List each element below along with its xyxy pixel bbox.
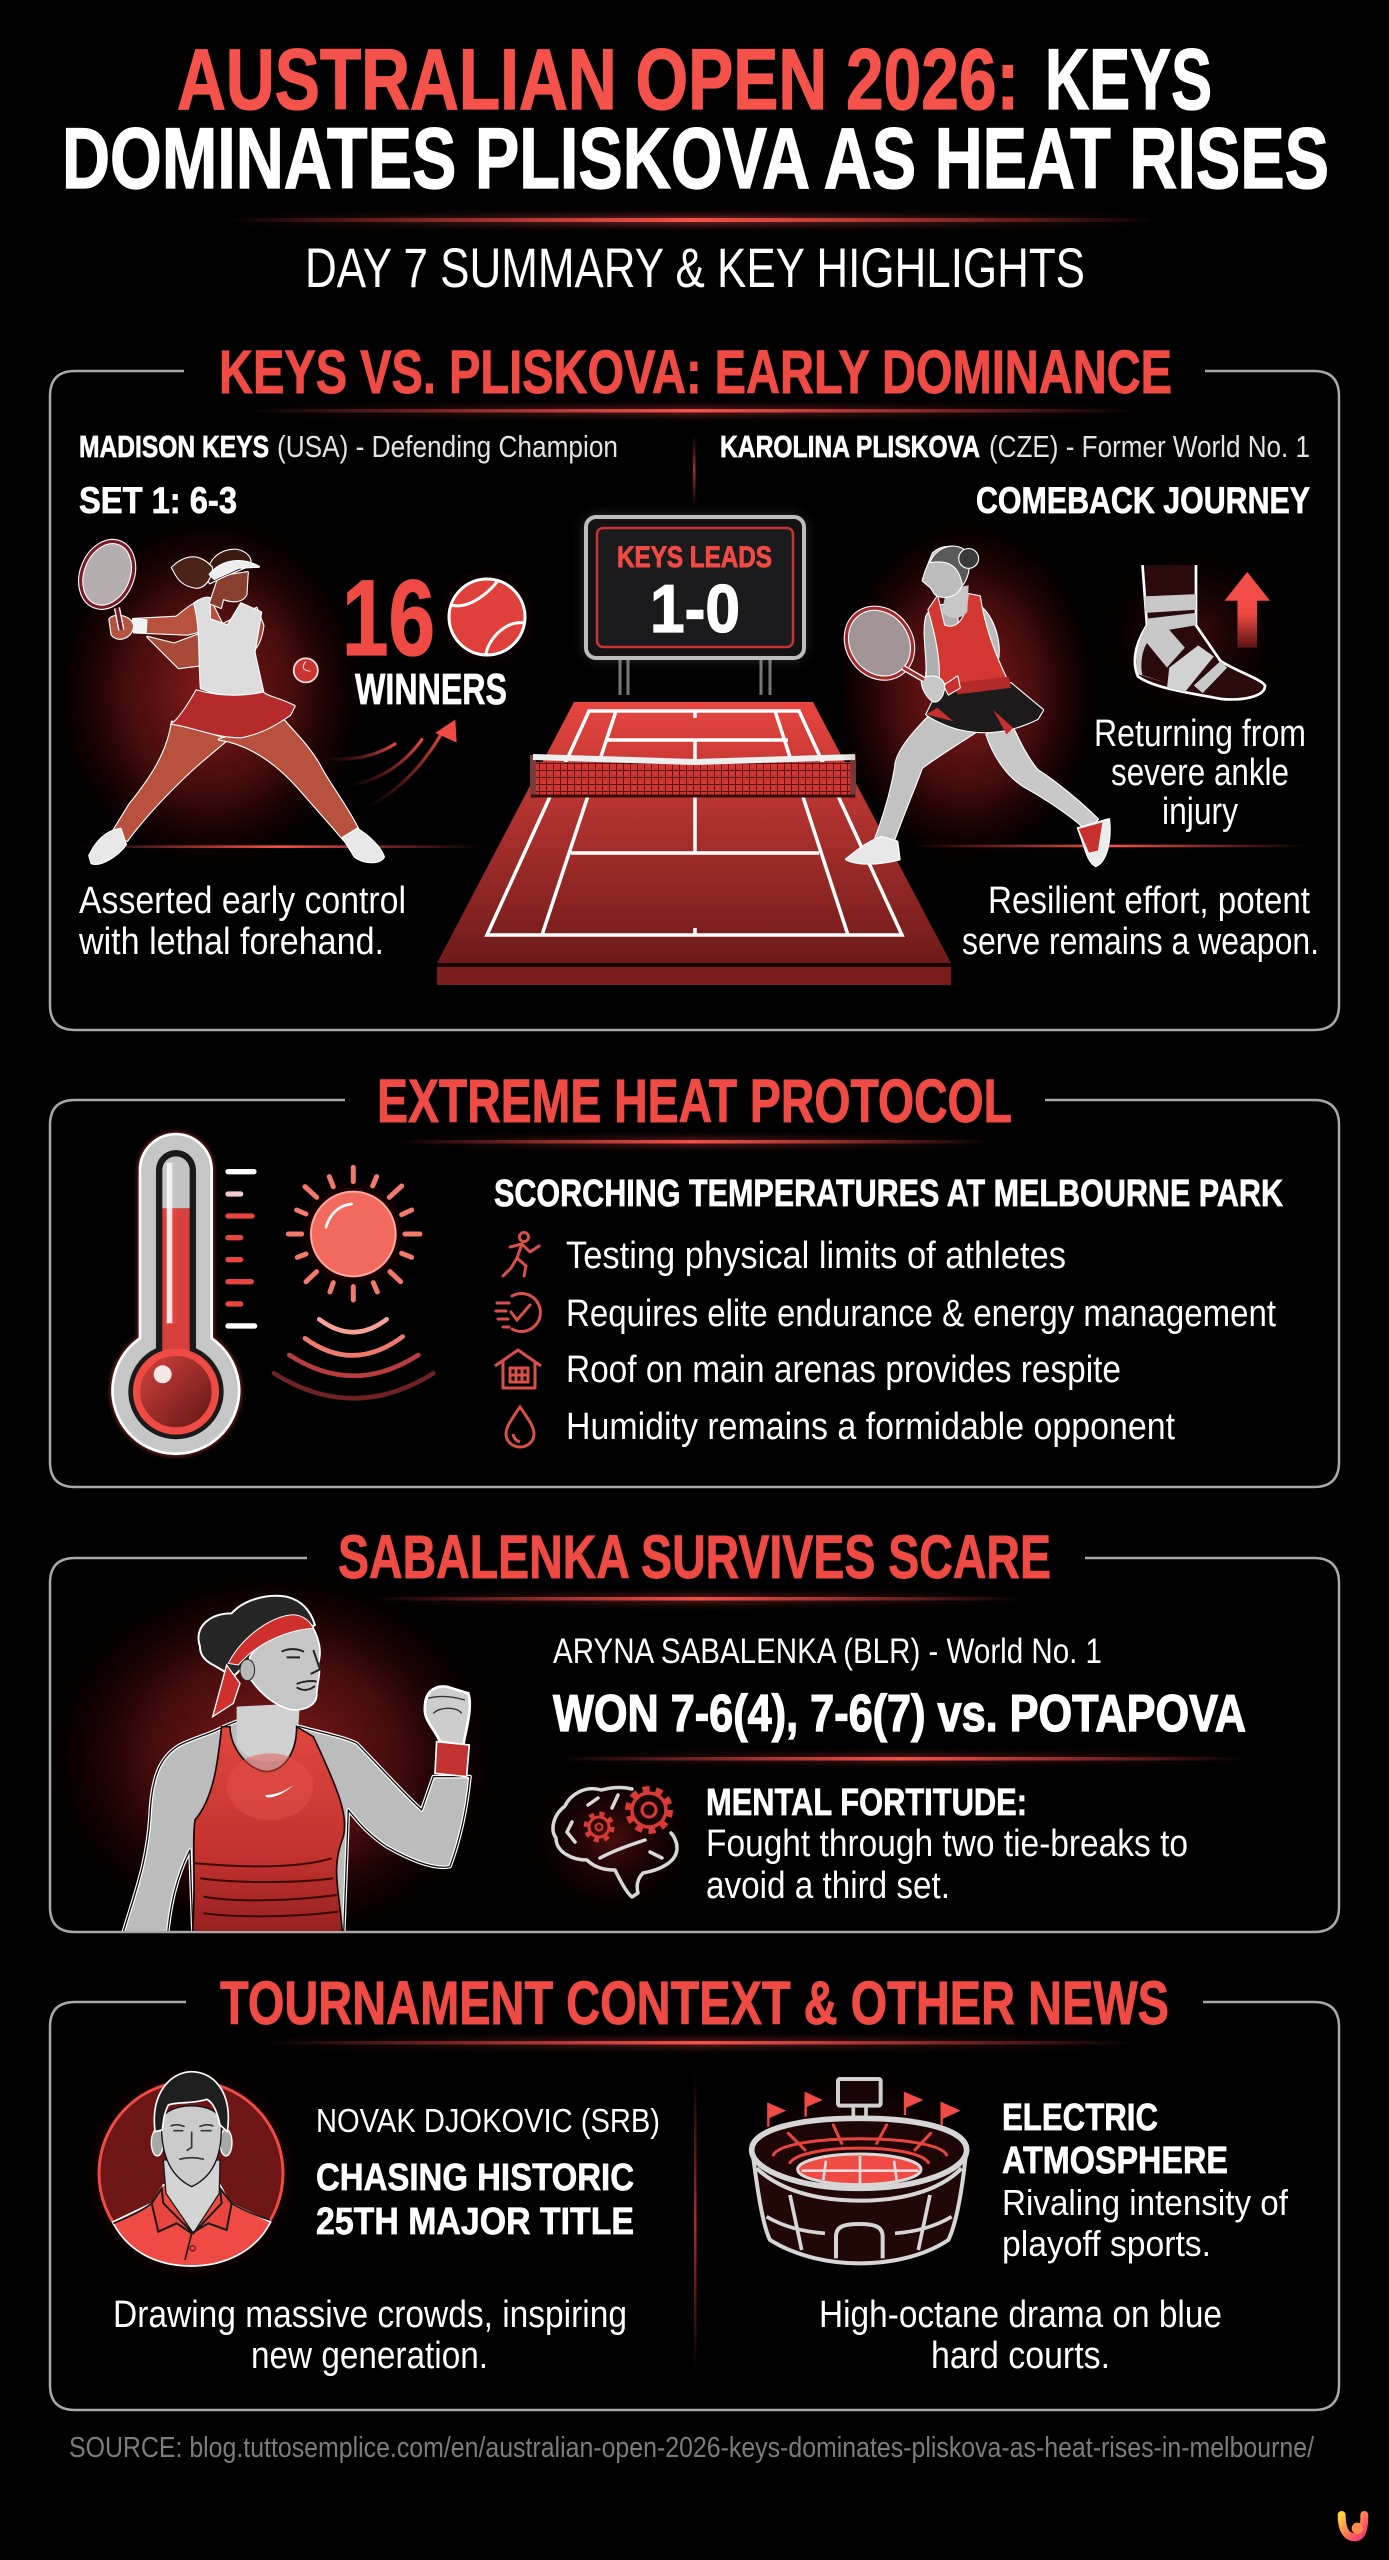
panel: Sabalenka: [47, 1523, 1339, 1943]
Sabalenka label: ARYNA SABALENKA (BLR) - World No. 1: [553, 1632, 1102, 1671]
heading: Sabalenka: SABALENKA SURVIVES SCARE: [338, 1523, 1051, 1591]
Pliskova player label: (CZE) - Former World No. 1: [989, 429, 1310, 464]
Pliskova caption: Resilient effort, potent: [988, 880, 1310, 922]
Keys player label: SET 1: 6-3: [79, 480, 237, 521]
Pliskova player label: [720, 429, 1310, 521]
heading: Extreme heat: [377, 1067, 1012, 1146]
Djokovic text: CHASING HISTORIC: [316, 2157, 634, 2199]
Pliskova player label: COMEBACK JOURNEY: [976, 480, 1310, 521]
portrait: Novak Djokovic: [81, 2063, 301, 2283]
mental fortitude text: avoid a third set.: [706, 1865, 950, 1907]
atmosphere text: Rivaling intensity of: [1002, 2182, 1289, 2223]
atmosphere text: [1002, 2097, 1289, 2264]
icon: brain with gears: [527, 1765, 697, 1915]
title: KEYS: [1045, 32, 1212, 128]
ankle caption: severe ankle: [1111, 752, 1289, 794]
title: [62, 32, 1329, 207]
Pliskova caption: [962, 880, 1319, 963]
Djokovic text: 25TH MAJOR TITLE: [316, 2201, 634, 2243]
icon: runner: [503, 1232, 539, 1276]
icon: roofed arena: [495, 1350, 541, 1388]
atmosphere text: ATMOSPHERE: [1002, 2140, 1228, 2182]
Sabalenka label: WON 7-6(4), 7-6(7) vs. POTAPOVA: [553, 1685, 1246, 1743]
Keys player label: [79, 429, 618, 521]
heat list items: Humidity remains a formidable opponent: [566, 1406, 1175, 1448]
atmosphere caption: [819, 2294, 1222, 2377]
heading: Extreme heat: EXTREME HEAT PROTOCOL: [377, 1067, 1012, 1135]
figure: Aryna Sabalenka: [66, 1586, 481, 1931]
Djokovic text: NOVAK DJOKOVIC (SRB): [316, 2102, 660, 2139]
panel: Keys vs Pliskova: [50, 338, 1339, 1030]
icon: humidity drop: [506, 1407, 534, 1447]
ankle caption: injury: [1162, 791, 1238, 833]
Djokovic text: [316, 2102, 660, 2243]
Pliskova caption: serve remains a weapon.: [962, 921, 1319, 963]
Keys player label: (USA) - Defending Champion: [277, 429, 618, 464]
stat: 16 winners: 16: [342, 557, 435, 678]
title: AUSTRALIAN OPEN 2026:: [177, 32, 1019, 128]
mental fortitude text: [706, 1782, 1188, 1907]
stat: 16 winners: [342, 557, 542, 714]
heat list items: Roof on main arenas provides respite: [566, 1349, 1121, 1391]
Djokovic caption: [113, 2294, 627, 2377]
ankle caption: Returning from: [1094, 713, 1306, 755]
Djokovic caption: Drawing massive crowds, inspiring: [113, 2294, 627, 2336]
Keys caption: with lethal forehand.: [78, 921, 384, 963]
Pliskova player label: KAROLINA PLISKOVA: [720, 429, 980, 464]
scoreboard: [585, 516, 805, 695]
Keys caption: [78, 880, 406, 963]
heat list items: Testing physical limits of athletes: [566, 1235, 1066, 1277]
heat list items: Requires elite endurance & energy management: [566, 1293, 1276, 1335]
panel: Extreme heat protocol: [50, 1067, 1339, 1487]
atmosphere caption: High-octane drama on blue: [819, 2294, 1222, 2336]
Sabalenka label: [553, 1632, 1246, 1743]
Keys caption: Asserted early control: [79, 880, 406, 922]
figure: Madison Keys: [54, 514, 482, 871]
icon: stadium: [736, 2063, 983, 2277]
atmosphere text: playoff sports.: [1002, 2223, 1211, 2264]
arrow: forehand swoosh: [321, 719, 457, 809]
Djokovic caption: new generation.: [251, 2335, 488, 2377]
icon: sun: [274, 1167, 433, 1398]
ankle caption: [1094, 713, 1306, 833]
heat list items: [566, 1235, 1276, 1448]
panel: Tournament context: [50, 1969, 1339, 2410]
mental fortitude text: Fought through two tie-breaks to: [706, 1823, 1188, 1865]
atmosphere caption: hard courts.: [931, 2335, 1110, 2377]
scoreboard: 1-0: [650, 571, 740, 647]
atmosphere text: ELECTRIC: [1002, 2097, 1158, 2139]
mental fortitude text: MENTAL FORTITUDE:: [706, 1782, 1027, 1824]
heat list: [495, 1232, 1276, 1448]
heading: Sabalenka: [338, 1523, 1051, 1603]
Keys player label: MADISON KEYS: [79, 429, 269, 464]
logo: [1342, 2515, 1364, 2537]
figure: Karolina Pliskova: [833, 518, 1310, 866]
tennis court: [437, 702, 951, 985]
subtitle: DAY 7 SUMMARY & KEY HIGHLIGHTS: [305, 236, 1085, 299]
icon: bandaged ankle: [1100, 545, 1287, 723]
net: [531, 755, 855, 798]
icon: thermometer: [112, 1134, 255, 1454]
scoreboard: KEYS LEADS: [617, 541, 772, 574]
icon: stopwatch: [496, 1294, 540, 1332]
stat: 16 winners: WINNERS: [355, 665, 507, 714]
